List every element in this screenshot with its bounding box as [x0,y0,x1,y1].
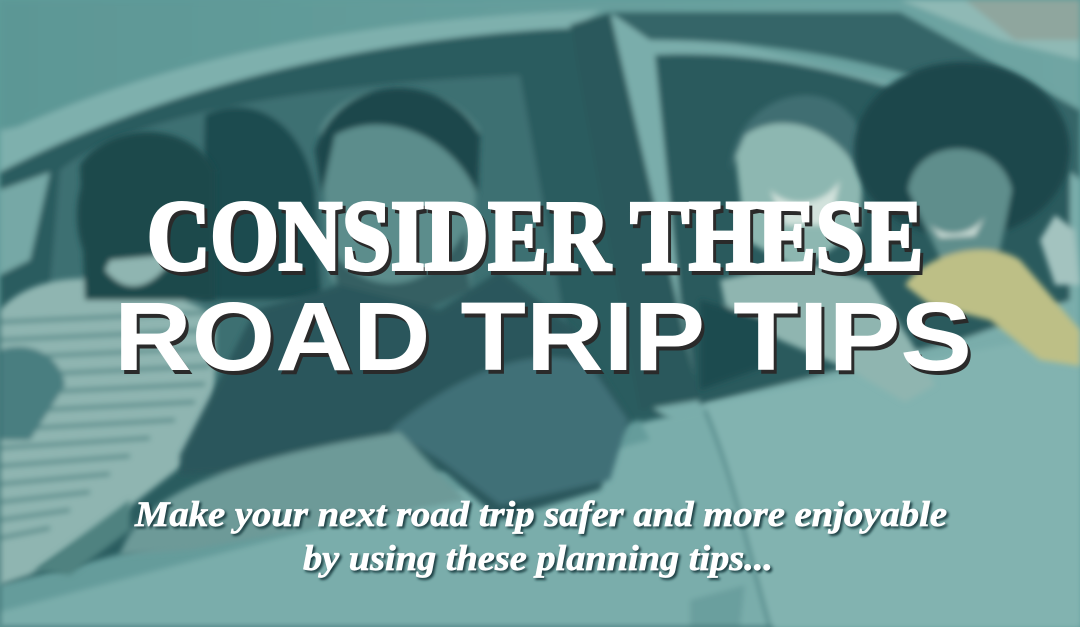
subtitle: by using these planning tips... [305,540,775,580]
subtitle [134,494,949,580]
title: consider these: CONSIDER THESE [147,180,923,291]
subtitle: by using these planning tips... [303,538,773,578]
title: road trip tips: ROAD TRIP TIPS [114,282,972,391]
person: man in center [35,88,630,575]
title: consider these: CONSIDER THESE [150,184,926,295]
lower door [0,330,1080,627]
person: woman on left [0,132,215,585]
subtitle: Make your next road trip safer and more enjoyable [134,494,947,534]
person: girl [854,62,1080,366]
person: boy [700,95,935,402]
subtitle: Make your next road trip safer and more enjoyable [136,496,949,536]
title: road trip tips: ROAD TRIP TIPS [117,286,975,395]
